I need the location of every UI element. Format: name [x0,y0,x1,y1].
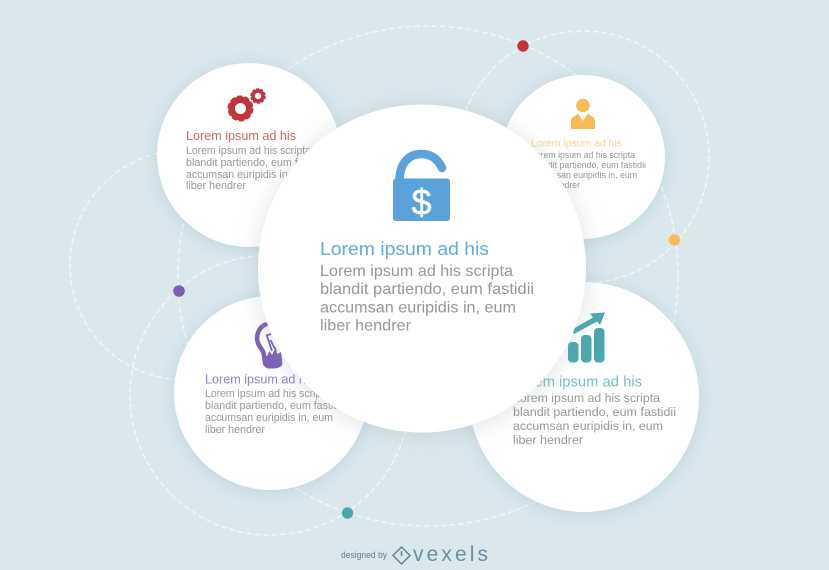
text block: bottom right: accumsan euripidis in, eum [513,419,663,433]
heading: top left: Lorem ipsum ad his [186,129,296,143]
text block: bottom right: Lorem ipsum ad his scripta [513,391,660,405]
text block: top left: blandit partiendo, eum fastidii [186,157,325,169]
dot: teal [342,507,353,519]
text block: top left: Lorem ipsum ad his scripta [186,145,311,157]
dot: purple [173,285,185,297]
dashed orbit rings [70,26,709,535]
panel: bottom left [174,296,368,490]
panel: bottom right [469,282,699,512]
text block: bottom left: liber hendrer [205,424,265,436]
icon: growth chart [568,312,605,362]
text block: top left [186,145,325,192]
text block: top left: liber hendrer [186,180,246,192]
heading: bottom left: Lorem ipsum ad his [205,372,315,386]
dot: yellow [669,234,680,246]
text block: top right: Lorem ipsum ad his scripta [531,150,635,160]
icon: light bulb [257,324,282,368]
panel: center [258,104,586,432]
text block: top right: liber hendrer [531,180,580,190]
wordmark: vexels: vexels [413,543,488,566]
text block: center: Lorem ipsum ad his scripta [320,263,513,280]
text block: top right [531,150,646,190]
icon: open padlock with dollar: $ [411,182,432,222]
heading: center: Lorem ipsum ad his [320,238,489,259]
icon: gears [228,89,265,120]
text block: top right: accumsan euripidis in, eum [531,170,637,180]
text block: top left: accumsan euripidis in, eum [186,169,314,181]
icon: person [571,99,595,129]
text block: center: blandit partiendo, eum fastidii [320,281,534,298]
text block: bottom left [205,388,344,436]
text block: bottom left: accumsan euripidis in, eum [205,412,333,424]
text block: bottom right [513,391,676,447]
text block: bottom right: liber hendrer [513,433,583,447]
dot: red [517,40,529,52]
text block: bottom left: Lorem ipsum ad his scripta [205,388,330,400]
panel: top left [157,63,341,247]
text block: bottom right: blandit partiendo, eum fastidii [513,405,676,419]
panel: top right [501,75,665,239]
footer: vexels credit: designed by [341,550,387,560]
footer: vexels credit [341,543,488,566]
icon: vexels diamond [393,547,410,564]
icon: open padlock with dollar [393,154,450,222]
heading: bottom right: Lorem ipsum ad his [513,374,642,390]
text block: center: accumsan euripidis in, eum [320,300,516,316]
text block: center: liber hendrer [320,318,412,334]
text block: top right: blandit partiendo, eum fastidii [531,160,646,170]
text block: bottom left: blandit partiendo, eum fastidii [205,400,344,412]
text block: center [320,263,534,334]
heading: top right: Lorem ipsum ad his [531,138,622,150]
